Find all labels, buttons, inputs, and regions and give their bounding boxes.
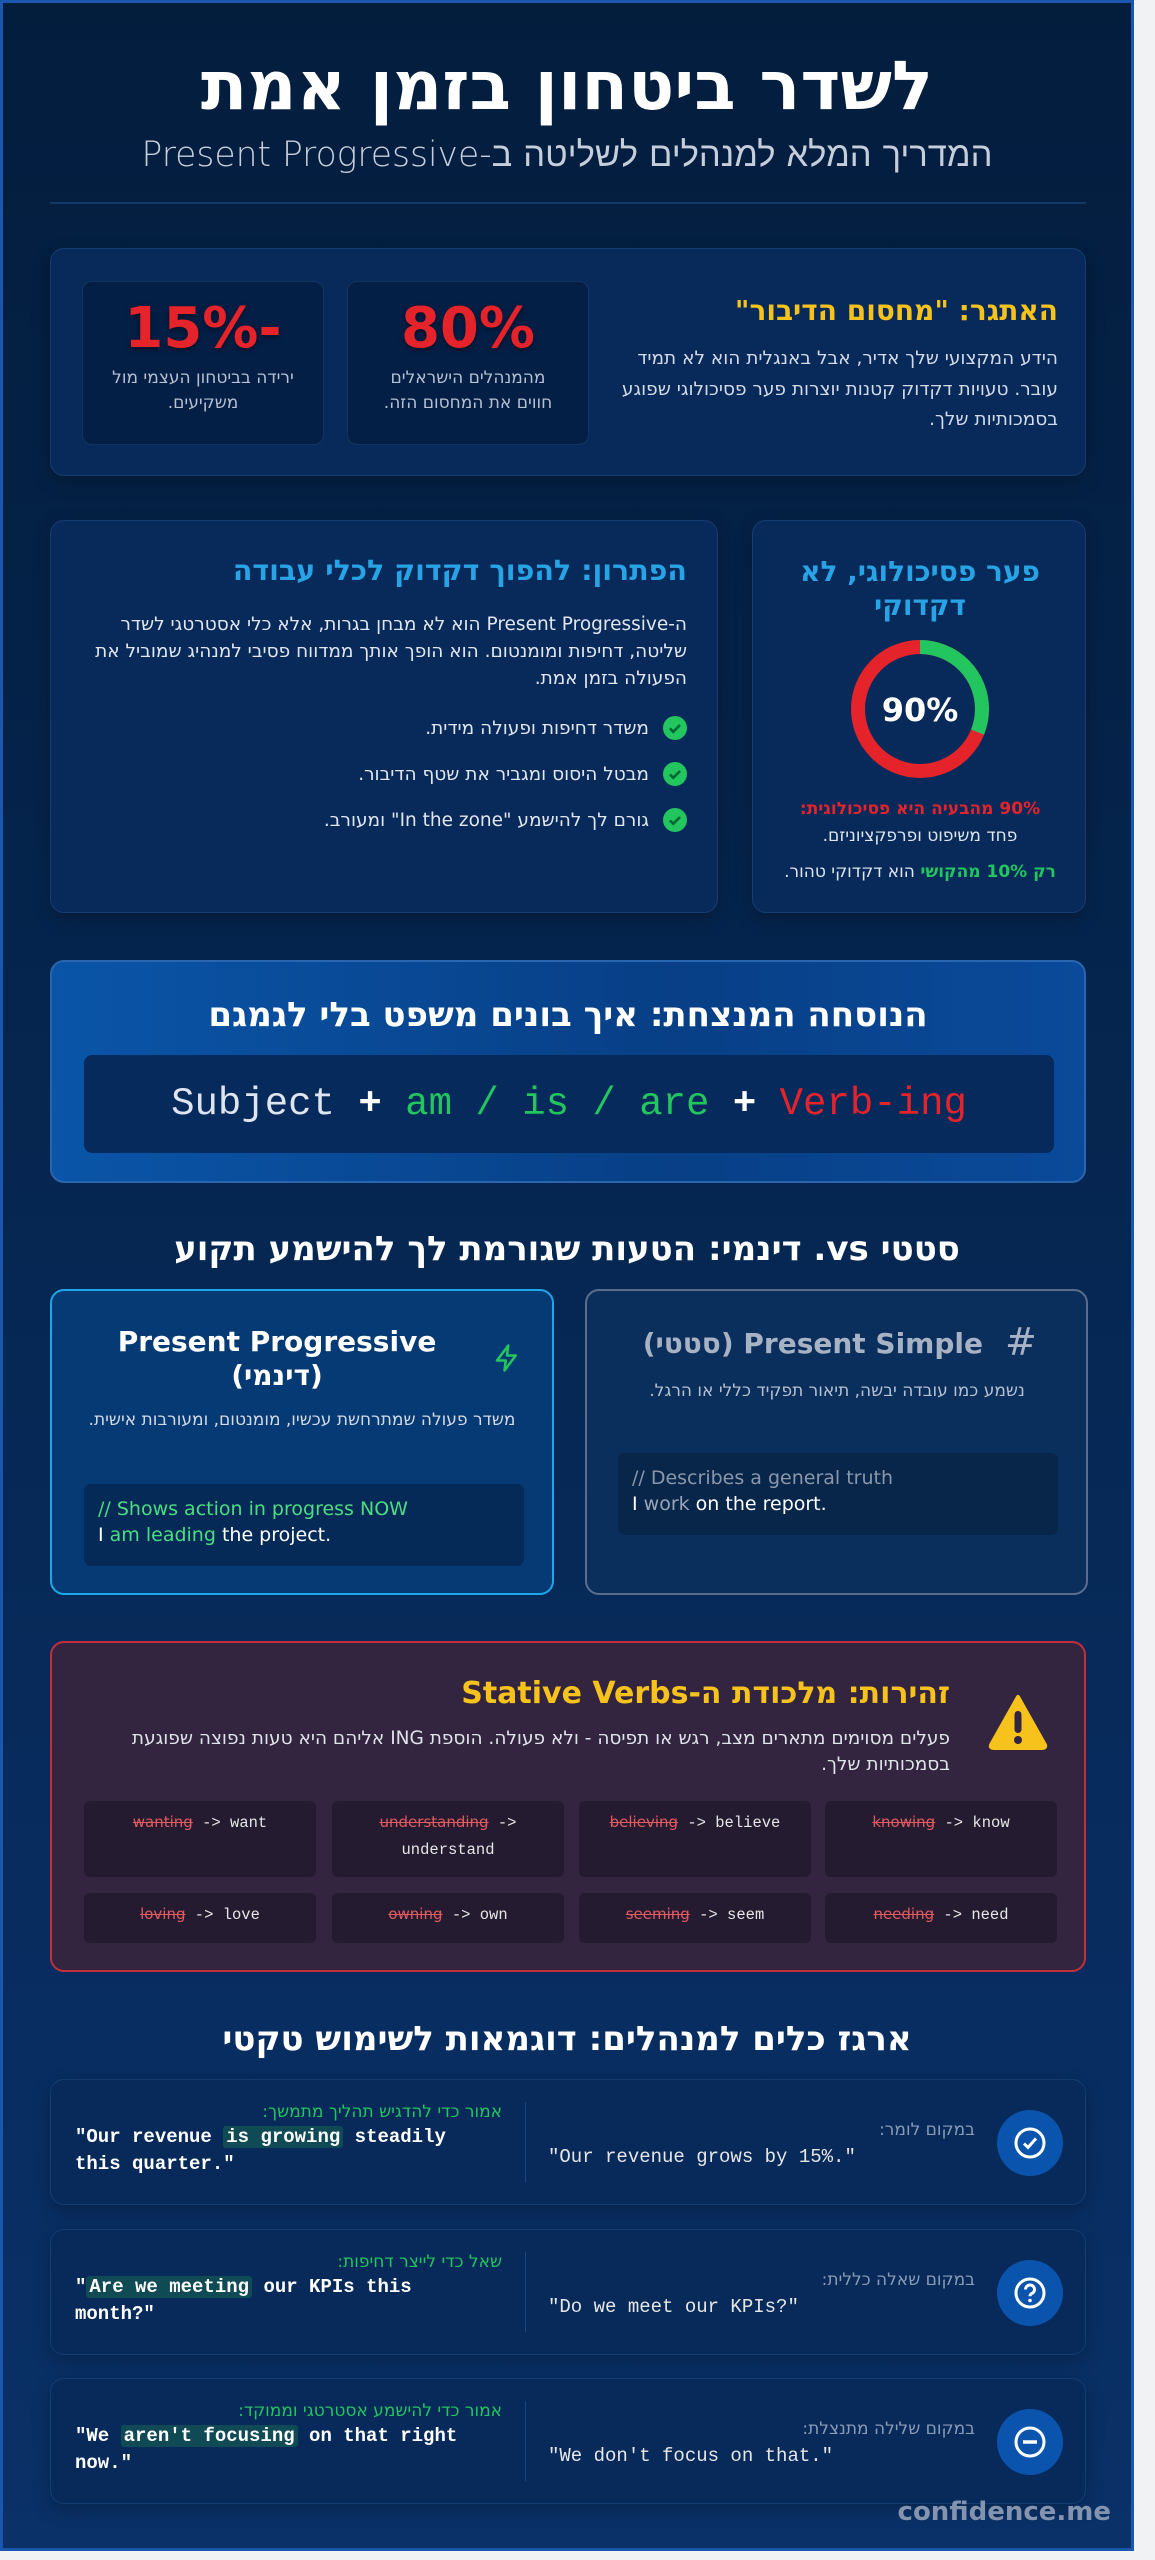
panel: solution	[50, 520, 718, 913]
code: progressive example: // Shows action in progress NOW	[98, 1498, 408, 1520]
icon: hash: #	[1005, 1320, 1037, 1364]
verb: seeming: seeming -> seem	[626, 1905, 764, 1924]
card: toolkit 3	[50, 2378, 1086, 2504]
title: progressive	[118, 1325, 436, 1392]
heading: formula: הנוסחה המנצחת: איך בונים משפט בלי לגמגם	[208, 995, 928, 1035]
stat: 80%	[347, 281, 589, 445]
heading: warning: זהירות: מלכודת ה-Stative Verbs	[461, 1676, 950, 1711]
text: warning body: פעלים מסוימים מתארים מצב, רגש או תפיסה - ולא פעולה. הוספת ING אליהם היא טעות נפוצה שפוגעת בסמכותיות שלך.	[132, 1728, 950, 1775]
text: instead of: "We don't focus on that."	[548, 2445, 833, 2467]
verb: believing: believing -> believe	[610, 1813, 780, 1832]
panel: present progressive card	[50, 1289, 554, 1595]
verb: needing: needing -> need	[873, 1905, 1009, 1924]
icon: check circle	[997, 2110, 1063, 2176]
icon: question circle	[997, 2260, 1063, 2326]
text: say instead: "Our revenue is growing steadily this quarter."	[75, 2126, 446, 2175]
text: instead of: במקום שלילה מתנצלת:	[802, 2419, 975, 2439]
panel: formula	[50, 960, 1086, 1183]
formula box	[84, 1055, 1054, 1153]
card: toolkit 2	[50, 2229, 1086, 2355]
item 3: גורם לך להישמע "In the zone" ומעורב.	[324, 810, 649, 831]
heading: toolkit: ארגז כלים למנהלים: דוגמאות לשימוש טקטי	[222, 2019, 912, 2059]
text: instead of: במקום לומר:	[879, 2120, 975, 2140]
text: instead of	[548, 2120, 975, 2168]
verb: wanting	[84, 1801, 316, 1877]
text: gap stats: 90% מהבעיה היא פסיכולוגית:	[800, 799, 1040, 819]
chart: donut 90%: 90%	[882, 691, 958, 729]
code: simple example	[618, 1453, 1058, 1535]
title: simple: Present Simple (סטטי)	[643, 1327, 983, 1360]
text: gap stats	[784, 799, 1056, 882]
verb: knowing	[825, 1801, 1057, 1877]
text: instead of: "Do we meet our KPIs?"	[548, 2296, 799, 2318]
verb: wanting: wanting -> want	[133, 1813, 267, 1832]
title: progressive: (דינמי)	[231, 1359, 323, 1392]
text: say instead: אמור כדי להדגיש תהליך מתמשך:	[262, 2102, 502, 2122]
title: progressive: Present Progressive	[118, 1325, 436, 1358]
stat: -15%	[82, 281, 324, 445]
code: simple example: I work on the report.	[632, 1493, 827, 1515]
icon: bolt	[496, 1344, 517, 1372]
title: לשדר ביטחון בזמן אמת	[201, 47, 933, 126]
text: gap stats: פחד משיפוט ופרפקציוניזם.	[823, 826, 1017, 846]
stat: 80%: חווים את המחסום הזה.	[384, 393, 552, 413]
text: solution body: ה-Present Progressive הוא לא מבחן בגרות, אלא כלי אסטרטגי לשדר שליטה, דחיפות ומומנטום. הוא הופך אותך ממדווח פסיבי למנהיג שמוביל את הפעולה בזמן אמת.	[95, 614, 687, 689]
item 1: משדר דחיפות ופעולה מידית.	[425, 718, 649, 739]
text: say instead	[75, 2401, 502, 2474]
list: benefits	[324, 716, 687, 832]
text: say instead: אמור כדי להישמע אסטרטגי וממוקד:	[238, 2401, 502, 2421]
subtitle: המדריך המלא למנהלים לשליטה ב-Present Progressive	[142, 135, 992, 175]
icon: warning triangle	[988, 1694, 1048, 1750]
code: progressive example	[84, 1484, 524, 1566]
heading: static vs dynamic: סטטי vs. דינמי: הטעות שגורמת לך להישמע תקוע	[174, 1229, 960, 1269]
verb: owning	[332, 1893, 564, 1943]
panel: challenge	[50, 248, 1086, 476]
text: instead of: במקום שאלה כללית:	[822, 2270, 975, 2290]
text: ask instead: "Are we meeting our KPIs this month?"	[75, 2276, 412, 2325]
code: progressive example: I am leading the project.	[98, 1524, 331, 1546]
text: say instead	[75, 2102, 502, 2175]
text: instead of	[548, 2419, 975, 2467]
card: toolkit 1	[50, 2079, 1086, 2205]
text: say instead: "We aren't focusing on that right now."	[75, 2425, 457, 2474]
text: progressive description: משדר פעולה שמתרחשת עכשיו, מומנטום, ומעורבות אישית.	[89, 1410, 515, 1430]
verb: understanding: understand	[401, 1841, 494, 1859]
verb: seeming	[579, 1893, 811, 1943]
stat: 80%: מהמנהלים הישראלים	[391, 368, 545, 388]
stat: -15%: משקיעים.	[168, 393, 238, 413]
code: simple example: // Describes a general truth	[632, 1467, 893, 1489]
verb: loving: loving -> love	[140, 1905, 260, 1924]
panel: stative verbs warning	[50, 1641, 1086, 1972]
panel: psychological gap	[752, 520, 1086, 913]
text: simple description: נשמע כמו עובדה יבשה, תיאור תפקיד כללי או הרגל.	[649, 1381, 1025, 1401]
text: challenge body: הידע המקצועי שלך אדיר, אבל באנגלית הוא לא תמיד עובר. טעויות דקדוק קטנות יוצרות פער פסיכולוגי שפוגע בסמכותיות שלך.	[622, 348, 1058, 430]
text: instead of	[548, 2270, 975, 2318]
verb: knowing: knowing -> know	[872, 1813, 1010, 1832]
text: ask instead	[75, 2252, 502, 2325]
stat: 80%: 80%	[401, 296, 535, 361]
footer: brand: confidence.me	[898, 2497, 1111, 2527]
text: ask instead: שאל כדי לייצר דחיפות:	[337, 2252, 502, 2272]
panel: present simple card	[585, 1289, 1088, 1595]
formula box: Subject + am / is / are + Verb-ing	[171, 1082, 967, 1126]
heading: solution: הפתרון: להפוך דקדוק לכלי עבודה	[233, 554, 687, 587]
item 2: מבטל היסוס ומגביר את שטף הדיבור.	[358, 764, 649, 785]
text: instead of: "Our revenue grows by 15%."	[548, 2146, 856, 2168]
icon: minus circle	[997, 2409, 1063, 2475]
verb: understanding	[332, 1801, 564, 1877]
verb: understanding: understanding ->	[380, 1813, 516, 1832]
heading: gap: פער פסיכולוגי, לא דקדוקי	[800, 555, 1040, 622]
grid: verbs	[84, 1801, 1057, 1943]
verb: believing	[579, 1801, 811, 1877]
verb: loving	[84, 1893, 316, 1943]
text: gap stats: רק 10% מהקושי הוא דקדוקי טהור.	[784, 862, 1056, 882]
stat: -15%: ירידה בביטחון העצמי מול	[112, 368, 294, 388]
stat: -15%: 15%-	[124, 296, 282, 361]
verb: owning: owning -> own	[388, 1905, 508, 1924]
verb: needing	[825, 1893, 1057, 1943]
heading: challenge: האתגר: "מחסום הדיבור"	[735, 294, 1058, 327]
chart: donut 90%	[851, 640, 989, 778]
